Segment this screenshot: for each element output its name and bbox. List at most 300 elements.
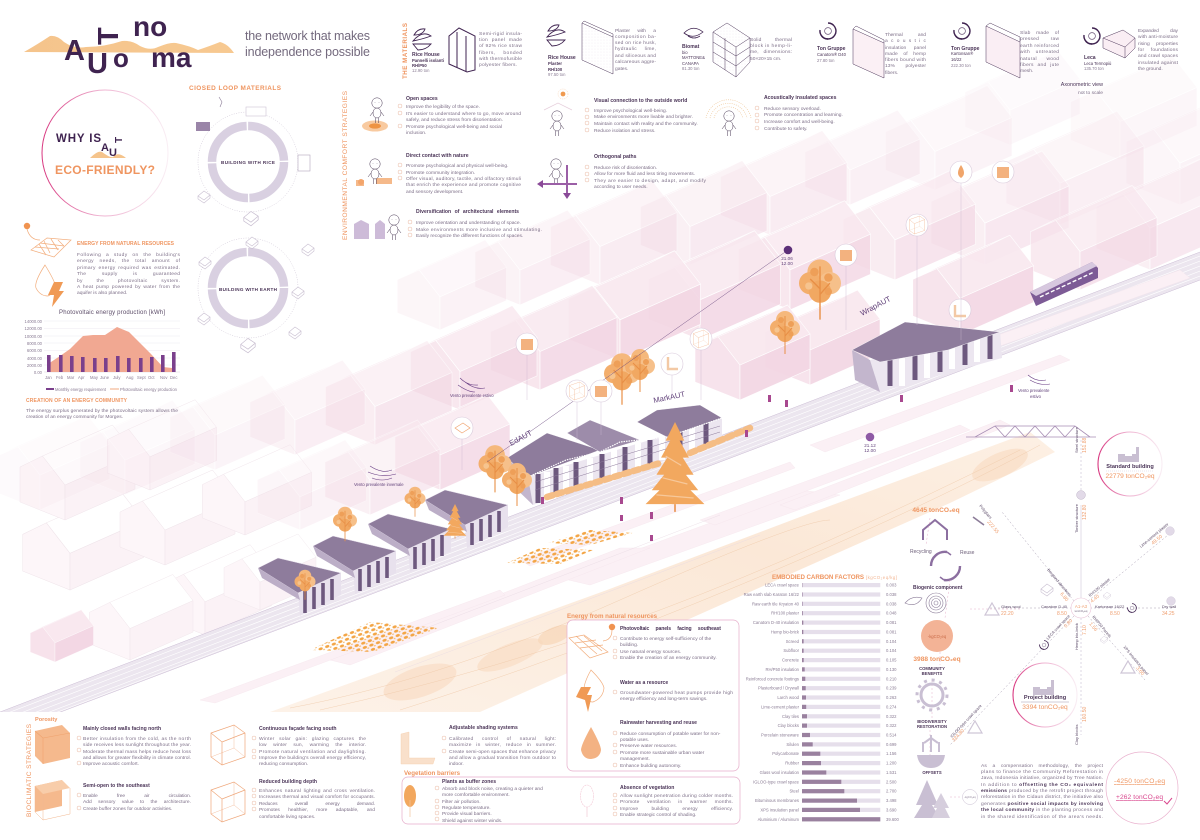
material: leca: and crawl spaces [1138, 53, 1179, 59]
rotated labels: LECA crawl space [1045, 613, 1071, 641]
strategy: diversification: Diversification of architectural elements [416, 209, 519, 215]
community benefits [917, 666, 947, 710]
icon: house recycling [923, 520, 960, 580]
strategy: visual connection: Reduce isolation and stress. [594, 128, 655, 134]
bar labels: Lime-cement plaster [761, 704, 800, 709]
material: ton gruppe kartonsan: earth reinforced [1020, 43, 1059, 49]
bar values: 3.690 [886, 807, 897, 812]
chart: photovoltaic energy production: July [113, 375, 121, 380]
rainwater: Reduce consumption of potable water for non- [620, 731, 721, 737]
heading: THE MATERIALS [402, 23, 409, 79]
strategy: continuous facade: Continuous façade facing south [259, 726, 337, 732]
subtitle: the network that makes [245, 29, 370, 43]
bar labels: Steel [789, 789, 799, 794]
community benefits: BENEFITS [922, 671, 943, 676]
icon: orange tree [404, 785, 416, 817]
heading: Vegetation barriers [404, 770, 461, 777]
bar labels: Bituminous membranes [755, 798, 799, 803]
material: ton gruppe canatom: a c o u s t i c [885, 38, 927, 44]
bar labels: Subfloor [783, 648, 800, 653]
wind labels: Vento prevalente estivo [450, 393, 494, 398]
bar values: 0.274 [886, 704, 897, 709]
rotated labels: Lime-cement plaster [1138, 521, 1170, 549]
bar values: 0.081 [886, 620, 897, 625]
chart: photovoltaic energy production: Nov [160, 375, 168, 380]
chart: photovoltaic energy production: Jan [45, 375, 52, 380]
biodiversity restoration [917, 719, 947, 768]
bar labels: RH/P50 insulation [765, 667, 800, 672]
strategy: direct contact with nature: Promote psychological and physical well-being. [406, 163, 508, 169]
strategy: orthogonal paths [537, 154, 707, 199]
strategy: orthogonal paths: Allow for more fluid and less tiring movements. [594, 171, 695, 177]
strategy: closed walls: side receives less sunlight throughout the year. [83, 742, 191, 748]
text block: The supply is guaranteed [77, 271, 180, 277]
centre: tonCO₂eq [1075, 609, 1088, 613]
strategy: visual connection: Visual connection to the outside world [594, 98, 687, 104]
strategy: continuous facade [252, 726, 366, 767]
bridge [966, 426, 1096, 437]
chart: photovoltaic energy production: 4000.00 [27, 356, 43, 361]
material: rice house panel [412, 28, 522, 73]
logo letters: no [133, 11, 167, 42]
strategy: shading: indoor. [449, 761, 464, 767]
text block: energy community: creation of an energy community for Morges. [26, 414, 123, 420]
material: ton gruppe kartonsan: natural wood [1020, 56, 1059, 62]
strategy: acoustically insulated spaces: Contribute to safety. [764, 126, 807, 132]
material: ton gruppe canatom: made of hemp [885, 51, 926, 57]
strategy: closed walls: Moderate thermal mass helps reduce heat loss [83, 749, 192, 755]
ring: building with earth: BUILDING WITH EARTH [219, 287, 278, 292]
rainwater: Promote more sustainable urban water [620, 750, 705, 756]
logo letters [64, 11, 192, 80]
water: Water as a resource [620, 680, 668, 686]
strategy: semi-open: Enable free air circulation. [83, 793, 191, 799]
chart: photovoltaic energy production: Dec [170, 375, 177, 380]
rotated labels: RH/P50 Panels [1091, 614, 1113, 639]
strategy: reduced depth [252, 779, 375, 820]
circle: balance [1106, 752, 1178, 824]
material: ton gruppe kartonsan: pressed raw [1020, 36, 1059, 42]
strategy: acoustically insulated spaces [706, 95, 843, 136]
strategy: shading: Adjustable shading systems [449, 725, 518, 731]
building labels: WrapAUT [859, 294, 893, 318]
water: energy efficiency and long-term savings. [620, 696, 707, 702]
heading: EMBODIED CARBON FACTORS [772, 574, 864, 581]
white panel below the map [0, 712, 395, 840]
rainwater: management. [620, 756, 650, 762]
icon: semi-open cube [35, 780, 70, 820]
material: leca: for foundations [1138, 47, 1179, 53]
bar values: 0.081 [886, 630, 897, 634]
sun path lines and markers: 21.06 [781, 256, 793, 261]
bar labels: Plasterboard / Drywall [758, 686, 799, 691]
absence text: Enable strategic control of shading. [620, 812, 696, 818]
strategy: open spaces: Improve the legibility of the space. [406, 104, 480, 110]
material: ton gruppe kartonsan: 222.30 ton [951, 63, 971, 68]
photovoltaic: Enable the creation of an energy community. [620, 655, 717, 661]
strategy: reduced depth: comfortable living spaces. [259, 814, 315, 820]
bar values: 0.048 [886, 611, 897, 616]
material: rice house panel: fibers, bonded [479, 50, 522, 56]
absence text: Promote ventilation in warmer months. [620, 799, 733, 805]
building labels: MarkAUT [653, 389, 686, 405]
rainwater: potable uses. [620, 737, 649, 743]
strategy: diversification: Improve orientation and understanding of space. [416, 220, 521, 226]
chart: photovoltaic energy production [25, 310, 180, 392]
plants text: Absorb and block noise, creating a quieter and [442, 786, 543, 792]
bar values: 2.500 [886, 779, 897, 784]
white panel bottom centre [395, 712, 785, 840]
centre [1071, 598, 1091, 618]
strategy: reduced depth: Enhances natural lighting and cross ventilation. [259, 788, 375, 794]
community benefits: COMMUNITY [919, 666, 945, 671]
bar values: 0.104 [886, 639, 897, 644]
compensation text [981, 763, 1104, 820]
material: ton gruppe canatom: 13% polyester [885, 63, 926, 69]
material: ton gruppe kartonsan: fibers and jute [1020, 62, 1059, 68]
strategy: direct contact with nature [356, 153, 521, 195]
compensation icon [962, 790, 978, 804]
rotated labels: Polyglass [978, 503, 993, 520]
icon: shading L [401, 732, 435, 764]
compensation text: As a compensation methodology, the project [981, 763, 1104, 769]
text block: Following a study on the building's [77, 252, 181, 258]
icon: solar panel [24, 223, 71, 257]
bar values: 0.514 [886, 732, 897, 738]
bar values: 0.038 [886, 592, 897, 597]
bar values: 1.200 [886, 761, 897, 766]
rotated labels: 49.50 [1150, 534, 1164, 547]
wind labels: Vento prevalente invernale [354, 482, 404, 487]
rotated labels: 7.10 [1082, 625, 1088, 635]
building WrapAUT [852, 322, 1002, 392]
bar values: 0.239 [886, 686, 897, 691]
text block: aquifer is also planned. [77, 290, 127, 296]
water [576, 670, 733, 712]
material: rice house plaster: calcareous aggre- [615, 59, 656, 65]
strategy: visual connection: Maintain contact with reality and the community. [594, 121, 698, 127]
material: ton gruppe kartonsan: Kartonsan® [951, 51, 974, 56]
material: biomat: block in hemp-li- [750, 43, 792, 49]
absence text: Allow sunlight penetration during colder months. [620, 793, 733, 799]
strategy: direct contact with nature: Promote community integration. [406, 170, 475, 176]
circle: standard building: Standard building [1106, 464, 1154, 470]
value 4645: 4645 tonCO₂eq [912, 507, 960, 514]
strategy: shading [442, 725, 557, 767]
strategy: direct contact with nature: Direct contact with nature [406, 153, 469, 159]
offsets [914, 770, 950, 818]
bar labels: IGLOO-type crawl space [753, 779, 800, 784]
material: ton gruppe canatom: Thermal and [885, 32, 926, 38]
material: rice house panel: tion panel made [479, 37, 522, 43]
spokes [950, 440, 1172, 745]
text block [77, 252, 181, 296]
ring: building with rice [196, 97, 310, 226]
icon: closed cube [35, 725, 70, 764]
panel: energy from natural resources [24, 223, 181, 420]
markers [968, 491, 1175, 733]
material: ton gruppe canatom: fibers bound with [885, 57, 926, 63]
rotated labels: 6.80 [1058, 591, 1069, 603]
chart: photovoltaic energy production: 0.00 [34, 370, 43, 375]
photovoltaic: Contribute to energy self-sufficiency of the [620, 636, 712, 642]
strategy: semi-open: Semi-open to the southeast [83, 783, 150, 789]
strategy: open spaces: inclusion. [406, 130, 426, 136]
bar labels: Porcelain stoneware [761, 732, 800, 738]
strategy: semi-open: Create buffer zones for outdoor activities. [83, 806, 172, 812]
strategy: continuous facade: Improve the building's overall energy efficiency, [259, 755, 366, 761]
chart: photovoltaic energy production: Photovoltaic energy production [kWh] [59, 310, 165, 316]
strategy: orthogonal paths: They are easier to design, adapt, and modify [594, 178, 707, 184]
box [567, 620, 739, 771]
strategy: semi-open [77, 783, 191, 812]
rainwater: Enhance building autonomy. [620, 763, 681, 769]
strategy: continuous facade: Promote natural ventilation and daylighting. [259, 749, 366, 755]
rotated labels: Kartonsan 16/22 [1095, 604, 1125, 609]
bar values: 2.700 [886, 789, 897, 794]
material: rice house plaster: hydraulic lime, [615, 46, 656, 52]
strategy: reduced depth: Reduced building depth [259, 779, 317, 785]
axonometric view note: Axonometric view [1061, 82, 1103, 88]
bar values: 0.130 [886, 667, 897, 672]
bar values: 1.531 [886, 770, 897, 775]
panel: energy from natural resources box [567, 613, 739, 771]
text block: by the photovoltaic system. [77, 278, 180, 284]
icon: outline cube two [211, 782, 245, 822]
compensation icon: -kgCO₂eq [964, 795, 976, 799]
bar values: 0.104 [886, 648, 897, 653]
strategy: reduced depth: Increases thermal and visual comfort for occupants. [259, 794, 375, 800]
circle: why is AUT eco-friendly: WHY IS [56, 133, 101, 145]
material: biomat: 81.30 ton [682, 66, 700, 71]
compensation text: generates positive social impacts by involving [981, 801, 1103, 807]
logo mountain [24, 36, 234, 53]
material: ton gruppe kartonsan: Ton Gruppe [951, 46, 980, 52]
material: leca: with anti-moisture [1138, 34, 1178, 40]
heading: ENERGY FROM NATURAL RESOURCES [77, 241, 175, 247]
compensation text: emissions produced by the retrofit project through [981, 788, 1103, 794]
rotated labels: 132.80 [1082, 504, 1088, 520]
material: rice house plaster: gates. [615, 66, 628, 72]
logo letters: T [93, 27, 125, 45]
panel: environmental comfort strategies [342, 89, 843, 240]
labels: Biogenic component [913, 585, 963, 591]
material: rice house panel: Pannelli isolanti [412, 58, 444, 63]
strategy: shading: maximize in winter, reduce in summer. [449, 742, 556, 748]
material: biomat: bio [682, 50, 688, 55]
rotated labels: 3.60 [1134, 665, 1145, 677]
material: ton gruppe canatom: Ton Gruppe [817, 46, 846, 52]
bar labels: Rubber [785, 761, 800, 766]
material: rice house panel: of 92% rice straw [479, 43, 522, 49]
absence text: Improve building energy efficiency. [620, 806, 733, 812]
rainwater [581, 720, 721, 769]
ring: building with rice: BUILDING WITH RICE [221, 160, 275, 165]
strategy: closed walls: Mainly closed walls facing north [83, 726, 161, 732]
bar labels: Glass wool insulation [760, 770, 800, 775]
circle: why is AUT eco-friendly: A [101, 142, 109, 154]
pavilions row [258, 490, 508, 616]
chart: photovoltaic energy production: Aug [126, 375, 134, 380]
material: leca: 135.70 ton [1084, 66, 1104, 71]
material: biomat: Biomat [682, 44, 700, 50]
background houses: pale outline quarter [20, 400, 316, 660]
bar labels: RH/100 plaster [771, 611, 800, 616]
rotated labels: Steel structure [1074, 426, 1079, 453]
strategy: diversification [354, 209, 542, 240]
material: rice house panel: RH/P50 [412, 63, 427, 68]
sun path lines and markers: 21.12 [864, 443, 876, 448]
rotated labels: 160.50 [1082, 706, 1088, 722]
compensation text: the local community in the planting process and [981, 807, 1103, 813]
chart: photovoltaic energy production: Apr [78, 375, 85, 380]
rotated labels: Bergland absorbers [1046, 567, 1073, 597]
plants text: more comfortable environment. [442, 792, 510, 798]
material: ton gruppe canatom [817, 23, 927, 78]
bar values: 0.105 [886, 658, 897, 663]
small pink house bottom left [30, 610, 94, 662]
rotated labels: IGLOO-type crawl space [949, 703, 983, 739]
compensation text: plans to finance the Community Reforestation in [981, 769, 1103, 775]
icon: outline tree [580, 785, 594, 817]
strategy: open spaces: Promote psychological well-being and social [406, 124, 502, 130]
sun path lines and markers [487, 246, 876, 462]
circle: salmon: -kgCO₂eq [928, 634, 947, 639]
logo letters: o [113, 43, 129, 73]
material: rice house plaster: composition ba- [615, 34, 656, 40]
bar labels: Concrete [782, 658, 800, 663]
rotated labels: 1.56 [1087, 621, 1098, 633]
rotated labels: 222.55 [985, 519, 1000, 535]
material: ton gruppe kartonsan: mesh. [1020, 68, 1033, 74]
material: ton gruppe canatom: insulation panel [885, 45, 926, 51]
bar values: 0.003 [886, 583, 897, 588]
ring: building with earth [198, 237, 314, 353]
strategy: visual connection: Make environments more livable and brighter. [594, 114, 693, 120]
map pins [451, 161, 1014, 470]
chart: photovoltaic energy production: Feb [56, 375, 64, 380]
icon: tree rings and leaf [905, 593, 946, 613]
strategy: closed walls: and allows for greater flexibility in climate control. [83, 755, 191, 761]
material: leca [1084, 28, 1179, 72]
street and rail band [0, 252, 1200, 735]
bar values: 0.210 [886, 676, 897, 681]
strategy: acoustically insulated spaces: Promote concentration and learning. [764, 112, 843, 118]
rotated labels: Clay blocks [1074, 725, 1079, 745]
absence text [613, 785, 733, 818]
panel: the materials [402, 21, 1179, 79]
biogenic column [905, 507, 1020, 818]
circle: project building: Project building [1024, 695, 1067, 701]
material: rice house plaster: Rice House [548, 55, 576, 61]
material: ton gruppe canatom: 27.80 ton [817, 58, 835, 63]
panel: vegetation barriers [402, 770, 740, 824]
strategy: open spaces: It's easier to understand where to go, move around [406, 111, 521, 117]
material: biomat: Solid thermal [750, 37, 792, 43]
value 3988: 3988 tonCO₂eq [913, 656, 961, 663]
wind labels: estivo [1030, 394, 1042, 399]
compensation text: Java, Indonesia initiative, organized by Tree Nation. [981, 775, 1103, 781]
bar values: 1.156 [886, 751, 897, 756]
rotated labels: Glass wool [1001, 604, 1021, 609]
bar values: 0.322 [886, 714, 897, 719]
strategy: continuous facade: low winter sun, warming the interior. [259, 742, 366, 748]
chart: photovoltaic energy production: 10000.00 [25, 334, 43, 339]
bar values: 0.322 [886, 723, 897, 728]
background houses: pink quarter [0, 50, 1200, 530]
chart: photovoltaic energy production: May [90, 375, 99, 380]
bar labels: Clay blocks [778, 723, 799, 728]
plants text: Shield against winter winds. [442, 818, 502, 824]
circle: project building [1013, 663, 1077, 727]
building labels [508, 294, 893, 448]
chart: embodied carbon factors [744, 574, 899, 822]
chart: photovoltaic energy production: 12000.00 [25, 326, 43, 331]
rotated labels: 324.80 [951, 728, 966, 743]
bar values: 3.498 [886, 798, 897, 803]
icon: drop and bolt [36, 265, 64, 307]
logo letters: U [87, 48, 108, 80]
building labels: EdAUT [508, 428, 534, 448]
logo letters: ma [151, 42, 192, 73]
strategy: diversification: Make environments more inclusive and stimulating. [416, 227, 542, 233]
material: ton gruppe kartonsan: Slab made of [1020, 30, 1060, 36]
rice fields [310, 530, 633, 652]
material: rice house plaster [547, 21, 656, 77]
strategy: open spaces: safely, and reduce stress from disorientation. [406, 117, 503, 123]
chart: photovoltaic energy production: June [100, 375, 110, 380]
material: biomat: CANAPA [682, 61, 699, 66]
bar values: 39.600 [886, 817, 899, 822]
icon: outline cube one [211, 725, 245, 765]
circle: project building: 3394 tonCO₂eq [1022, 704, 1068, 711]
heading: BIOCLIMATIC STRATEGIES [26, 723, 33, 817]
subtitle: independence possible [245, 45, 370, 59]
bar values: 0.699 [886, 742, 897, 747]
radial carbon diagram [949, 426, 1176, 745]
ground paths [200, 270, 1190, 703]
plants text: Provide visual barriers. [442, 811, 492, 817]
circle: balance: +262 tonCO₂eq [1116, 794, 1163, 801]
heading: Energy from natural resources [567, 613, 658, 620]
compensation text: In addition to offsetting the CO₂ equivalent [981, 782, 1103, 788]
box [402, 777, 740, 824]
strategy: reduced depth: Reduces overall energy demand. [259, 801, 375, 807]
material: leca: Leca [1084, 55, 1096, 61]
circle: why is AUT eco-friendly: U [109, 147, 117, 159]
logo letters: A [64, 35, 85, 67]
heading: CIOSED LOOP MATERIALS [189, 85, 282, 92]
offsets: OFFSETS [922, 770, 942, 775]
bar labels: Raw earth slab Karaton 16/22 [744, 592, 800, 597]
chart: photovoltaic energy production: Sept [137, 375, 146, 380]
bar values: 0.038 [886, 601, 897, 606]
bars [802, 583, 880, 821]
strategy: shading: Create semi-open spaces that enhance privacy [449, 749, 557, 755]
bar labels: Hemp bio-brick [771, 630, 800, 634]
bar labels: LECA crawl space [765, 583, 800, 588]
heading: ENVIRONMENTAL COMFORT STRATEGIES [342, 90, 349, 240]
strategy: closed walls [77, 726, 192, 767]
material: biomat: MATTONE& [682, 55, 705, 60]
strategy: continuous facade: reducing consumption. [259, 761, 308, 767]
material: rice house plaster: and siliceous and [615, 53, 656, 59]
circle: why is AUT eco-friendly: T [114, 137, 125, 143]
strategy: diversification: Easily recognize the different functions of spaces. [416, 233, 523, 239]
text block: energy needs, the total amount of [77, 258, 181, 264]
strategy: shading: Calibrated control of natural light: [449, 736, 556, 742]
chart: photovoltaic energy production: 2000.00 [27, 363, 43, 368]
